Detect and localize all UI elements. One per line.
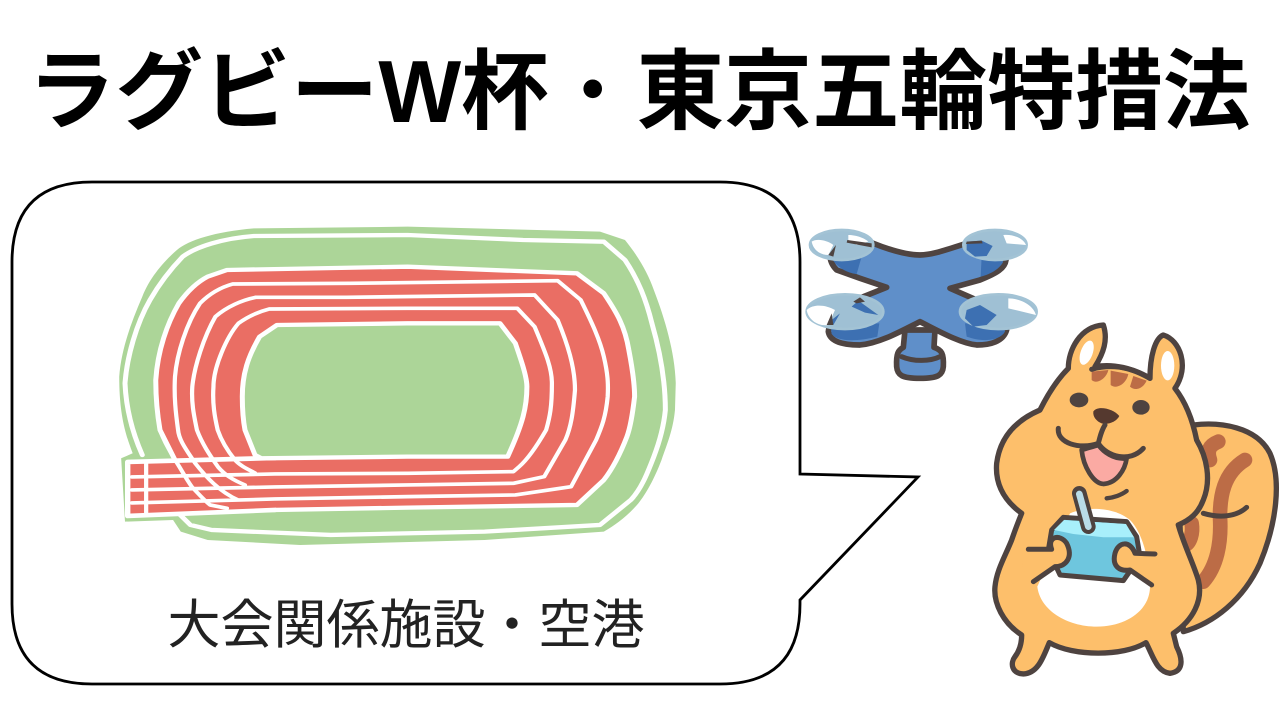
belly	[1037, 509, 1150, 627]
squirrel tail	[1180, 424, 1276, 632]
icon: drone	[807, 230, 1037, 378]
lane lines	[132, 281, 608, 514]
rotor highlights	[807, 235, 1036, 325]
speech bubble	[12, 182, 918, 684]
drone body	[828, 240, 1007, 345]
stadium grass outer	[119, 227, 676, 545]
mouth	[1058, 425, 1143, 457]
outer white line	[125, 235, 665, 535]
rotors	[810, 230, 873, 260]
rotor shadows	[832, 241, 997, 327]
tail line	[1203, 507, 1247, 516]
red running track	[156, 267, 635, 510]
motors	[831, 257, 1005, 340]
start block	[128, 458, 275, 516]
chin line	[1107, 491, 1127, 498]
infield	[242, 323, 527, 458]
inner ears	[1077, 339, 1097, 367]
controller	[1048, 517, 1140, 581]
squirrel body	[995, 325, 1208, 674]
tongue	[1082, 445, 1127, 484]
nose	[1093, 408, 1119, 424]
right hand	[1114, 544, 1158, 585]
title: ラグビーW杯・東京五輪特措法	[28, 43, 1250, 141]
tail stripes	[1185, 442, 1245, 582]
icon: squirrel holding controller	[995, 325, 1276, 674]
icon: athletics stadium track	[119, 227, 676, 545]
left hand	[1023, 537, 1069, 582]
label: venues and airports: 大会関係施設・空港	[168, 596, 644, 655]
head stripes	[1092, 370, 1147, 389]
eyes	[1070, 393, 1088, 407]
drone camera mount	[897, 330, 943, 378]
controller stick	[1079, 493, 1088, 527]
